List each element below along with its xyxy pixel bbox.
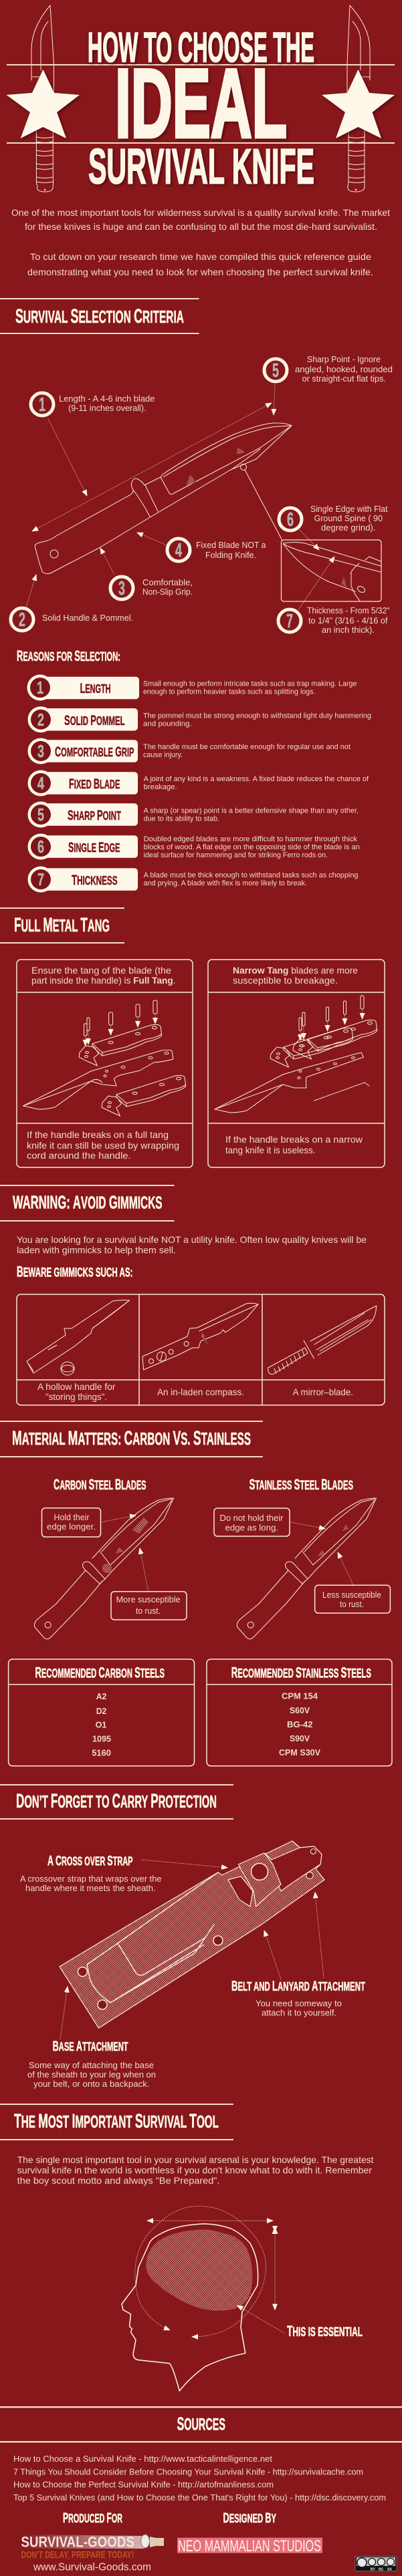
callout 3 (100, 548, 193, 599)
panel: carbon steel blades (34, 1476, 187, 1639)
icon: left header knife (31, 5, 54, 192)
text: warning: laden with gimmicks to help them sell. (17, 1245, 176, 1256)
callout: base attachment: of the sheath to your leg when on (27, 2070, 156, 2080)
row 2 solid pommel: SOLID POMMEL (64, 713, 125, 728)
panel: full tang: Ensure the tang of the blade (the (31, 965, 171, 976)
callout: more susceptible (111, 1548, 187, 1620)
callout 5: Sharp Point - Ignore (307, 354, 381, 364)
heading: survival selection criteria: SURVIVAL SELECTION CRITERIA (15, 305, 184, 327)
panel: recommended carbon steels: 1095 (92, 1734, 111, 1744)
callout 2: Solid Handle & Pommel. (42, 613, 133, 623)
callout 7: to 1/4" (3/16 - 4/16 of (308, 615, 388, 625)
row 6 single edge: SINGLE EDGE (68, 840, 120, 855)
intro text: One of the most important tools for wilderness survival is a quality survival knife. The market (11, 207, 390, 218)
icon: narrow tang exploded knife (215, 996, 377, 1113)
row 2 solid pommel (28, 706, 371, 732)
row 5 sharp point: A sharp (or spear) point is a better defensive shape than any other, (144, 807, 359, 815)
row 1 length: 1 (37, 678, 43, 698)
panel: recommended stainless steels: S90V (290, 1733, 310, 1743)
callout 6: Single Edge with Flat (310, 504, 388, 514)
callout: base attachment: BASE ATTACHMENT (53, 2039, 128, 2054)
text: knowledge (17, 2154, 374, 2186)
panel: full tang: If the handle breaks on a full tang (27, 1129, 169, 1140)
heading: sources: SOURCES (177, 2414, 225, 2434)
callout 1 (31, 393, 155, 496)
row 7 thickness: A blade must be thick enough to withstand tasks such as chopping (144, 871, 359, 879)
panel: narrow tang: tang knife it is useless. (225, 1145, 316, 1155)
panel: narrow tang (208, 960, 385, 1167)
icon: sheath (60, 1841, 324, 2028)
row 6 single edge: 6 (37, 837, 44, 857)
callout 6 (279, 504, 388, 550)
icon: creative commons badge: BY (371, 2567, 376, 2571)
row 6 single edge: Doubled edged blades are more difficult to hammer through thick (144, 835, 357, 843)
text: knowledge: the boy scout motto and always "Be Prepared". (17, 2175, 219, 2186)
panel: recommended carbon steels: 5160 (92, 1748, 111, 1758)
list: sources (13, 2454, 386, 2502)
logo: neo mammalian studios: NEO MAMMALIAN STUDIOS (178, 2537, 321, 2555)
panel: recommended carbon steels: A2 (96, 1691, 106, 1701)
list: sources: How to Choose the Perfect Survival Knife - http://artofmanliness.com (13, 2480, 274, 2490)
panel: full tang: part inside the handle) is Full Tang. (31, 975, 175, 986)
row 4 fixed blade: A joint of any kind is a weakness. A fixed blade reduces the chance of (144, 775, 369, 783)
icon: right star (322, 69, 395, 138)
callout 4: Folding Knife. (205, 550, 256, 560)
callout 3: Comfortable, (142, 577, 193, 587)
row 3 comfortable grip: The handle must be comfortable enough for regular use and not (143, 743, 350, 751)
panel: recommended stainless steels (207, 1659, 392, 1766)
panel: recommended stainless steels: CPM S30V (279, 1747, 320, 1757)
logo: survival goods: www.Survival-Goods.com (33, 2562, 151, 2573)
row 1 length (27, 675, 357, 700)
row 7 thickness (28, 866, 359, 893)
callout: belt and lanyard attachment: You need someway to (256, 1999, 342, 2009)
icon: compass knife (142, 1303, 258, 1370)
row 2 solid pommel: 2 (37, 710, 44, 730)
row 5 sharp point: SHARP POINT (68, 808, 121, 823)
panel: recommended stainless steels: RECOMMENDED STAINLESS STEELS (231, 1665, 371, 1681)
icon: main knife (35, 423, 292, 574)
callout 1: (9-11 inches overall). (68, 403, 146, 413)
panel: gimmick table: A mirror–blade. (293, 1387, 353, 1397)
header rule top (7, 64, 395, 65)
panel: carbon steel blades: CARBON STEEL BLADES (54, 1476, 146, 1493)
intro text: demonstrating what you need to look for when choosing the perfect survival knife. (27, 267, 373, 277)
callout 6: 6 (287, 509, 294, 531)
callout 5 (264, 354, 393, 415)
callout 4 (137, 533, 266, 561)
panel: full tang (17, 960, 193, 1167)
inset: blade cross-section (281, 540, 381, 601)
panel: recommended carbon steels: D2 (96, 1706, 106, 1716)
callout 5: angled, hooked, rounded (295, 364, 393, 374)
row 5 sharp point (28, 802, 359, 827)
row 7 thickness: 7 (37, 869, 44, 889)
row 4 fixed blade: breakage. (144, 783, 177, 791)
intro text: for these knives is huge and can be confusing to all but the most die-hard survivalist. (25, 221, 377, 232)
panel: recommended stainless steels: BG-42 (287, 1719, 313, 1729)
callout 1: 1 (39, 394, 45, 416)
callout: belt and lanyard attachment: BELT AND LANYARD ATTACHMENT (231, 1979, 365, 1994)
panel: recommended carbon steels (9, 1659, 194, 1766)
callout 6: degree grind). (321, 523, 376, 533)
callout 2: 2 (19, 609, 25, 631)
row 3 comfortable grip: COMFORTABLE GRIP (55, 744, 134, 760)
panel: narrow tang: If the handle breaks on a narrow (225, 1134, 363, 1145)
logo: survival goods: DON'T DELAY, PREPARE TODAY! (21, 2549, 134, 2561)
callout 6: Ground Spine ( 90 (314, 513, 383, 523)
row 4 fixed blade (28, 770, 369, 797)
callout 1: Length - A 4-6 inch blade (59, 394, 155, 404)
panel: recommended stainless steels: S60V (290, 1705, 310, 1715)
row 7 thickness: and prying. A blade with flex is more likely to break. (144, 879, 307, 887)
callout: cross over strap: handle where it meets the sheath. (25, 1884, 156, 1893)
row 2 solid pommel: and pounding. (143, 720, 192, 728)
callout: more susceptible: More susceptible (116, 1594, 181, 1604)
text: warning: You are looking for a survival knife NOT a utility knife. Often low quality knives will be (17, 1234, 367, 1245)
row 5 sharp point: due to its ability to stab. (144, 815, 219, 823)
panel: narrow tang: susceptible to breakage. (233, 975, 338, 986)
text: knowledge: The single most important tool in your survival arsenal is your knowledge. The greatest (17, 2154, 374, 2165)
row 6 single edge: blocks of wood. A flat edge on the opposing side of the blade is an (144, 843, 360, 851)
text: knowledge: survival knife in the world is worthless if you don't know what to do with it. Remember (17, 2165, 372, 2176)
heading: material matters: MATERIAL MATTERS: CARBON VS. STAINLESS (12, 1427, 251, 1449)
intro text (11, 207, 390, 277)
callout 7: Thickness - From 5/32" (307, 605, 390, 615)
callout: less susceptible: to rust. (340, 1599, 364, 1609)
callout: this is essential: THIS IS ESSENTIAL (287, 2323, 363, 2339)
callout: do not hold their edge (214, 1508, 325, 1536)
row 4 fixed blade: FIXED BLADE (69, 776, 120, 792)
row 6 single edge: ideal surface for hammering and for striking Ferro rods on. (144, 851, 328, 859)
callout: cross over strap (20, 1854, 227, 1893)
heading: full metal tang: FULL METAL TANG (14, 914, 110, 936)
row 2 solid pommel: The pommel must be strong enough to withstand light duty hammering (143, 712, 371, 720)
callout: cross over strap: A crossover strap that wraps over the (20, 1874, 162, 1884)
row 1 length: enough to perform heavier tasks such as splitting logs. (143, 688, 316, 696)
callout 5: or straight-cut flat tips. (302, 374, 386, 384)
callout: do not hold their edge: edge as long. (225, 1523, 278, 1533)
icon: creative commons badge: SA (387, 2567, 392, 2571)
row 3 comfortable grip: cause injury. (143, 751, 183, 759)
row 3 comfortable grip (28, 738, 350, 764)
subheading: beware gimmicks: BEWARE GIMMICKS SUCH AS: (17, 1264, 132, 1280)
callout: belt and lanyard attachment (231, 1892, 365, 2018)
row 1 length: LENGTH (80, 681, 111, 696)
callout: hold their edge: Hold their (54, 1512, 90, 1522)
callout: hold their edge (41, 1508, 136, 1537)
callout 4: Fixed Blade NOT a (196, 540, 266, 550)
panel: recommended carbon steels: O1 (96, 1720, 106, 1730)
callout 7: an inch thick). (322, 625, 375, 635)
icon: left star (7, 69, 80, 138)
panel: gimmick table (17, 1294, 385, 1405)
icon: stainless knife (237, 1498, 376, 1639)
title (88, 24, 314, 194)
text: warning (17, 1234, 367, 1256)
header rule bottom (7, 142, 395, 144)
heading: designed by: DESIGNED BY (223, 2511, 276, 2526)
panel: stainless steel blades (214, 1476, 390, 1639)
callout: base attachment: Some way of attaching the base (29, 2061, 154, 2070)
list: sources: Top 5 Survival Knives (and How to Choose the One That's Right for You) - http://dsc.discovery.com (13, 2492, 386, 2502)
panel: recommended carbon steels: RECOMMENDED CARBON STEELS (35, 1665, 165, 1681)
panel: gimmick table: "storing things". (45, 1392, 107, 1402)
icon: creative commons badge: NC (379, 2567, 384, 2571)
panel: narrow tang: Narrow Tang blades are more (233, 965, 358, 976)
panel: gimmick table: A hollow handle for (37, 1382, 116, 1392)
callout: more susceptible: to rust. (136, 1606, 161, 1616)
logo: survival goods (20, 2534, 164, 2573)
panel: gimmick table: An in-laden compass. (157, 1387, 244, 1397)
callout 5: 5 (272, 360, 279, 382)
row 5 sharp point: 5 (37, 805, 44, 825)
panel: full tang: knife it can still be used by wrapping (27, 1140, 179, 1151)
row 1 length: Small enough to perform intricate tasks such as trap making. Large (143, 680, 357, 688)
row 4 fixed blade: 4 (37, 773, 44, 793)
callout: this is essential (237, 2305, 363, 2339)
callout: belt and lanyard attachment: attach it to yourself. (262, 2009, 336, 2018)
callout 3: 3 (118, 578, 125, 599)
heading: most important survival tool: THE MOST IMPORTANT SURVIVAL TOOL (14, 2110, 219, 2132)
callout 7 (278, 557, 390, 635)
panel: full tang: cord around the handle. (27, 1150, 131, 1161)
callout: base attachment: your belt, or onto a backpack. (33, 2080, 150, 2089)
heading: produced for: PRODUCED FOR (63, 2511, 122, 2526)
title: IDEAL (115, 49, 287, 158)
panel: stainless steel blades: STAINLESS STEEL BLADES (249, 1476, 353, 1493)
icon: creative commons badge (355, 2557, 397, 2571)
list: reasons for selection (27, 675, 371, 893)
row 3 comfortable grip: 3 (37, 741, 44, 761)
callout 2 (11, 575, 133, 631)
callout: hold their edge: edge longer. (47, 1522, 96, 1532)
logo: neo mammalian studios (177, 2537, 322, 2555)
callout: base attachment (27, 1987, 156, 2089)
callout: less susceptible (315, 1552, 390, 1613)
list: sources: 7 Things You Should Consider Before Choosing Your Survival Knife - http://survivalcache.com (13, 2467, 363, 2477)
callout: less susceptible: Less susceptible (322, 1590, 381, 1600)
diagram: knife anatomy (11, 354, 393, 635)
icon: full tang exploded knife (23, 1000, 186, 1116)
callout: cross over strap: A CROSS OVER STRAP (47, 1854, 132, 1869)
icon: mirror blade knife (268, 1306, 377, 1374)
panel: recommended stainless steels: CPM 154 (282, 1691, 318, 1701)
icon: hollow handle knife (27, 1300, 130, 1375)
callout 3: Non-Slip Grip. (142, 587, 193, 597)
row 7 thickness: THICKNESS (72, 873, 118, 888)
intro text: To cut down on your research time we have compiled this quick reference guide (30, 251, 371, 262)
arrow: length (32, 403, 272, 531)
icon: carbon knife (34, 1498, 173, 1639)
icon: right header knife (347, 5, 370, 192)
callout 4: 4 (175, 540, 182, 561)
heading: warning avoid gimmicks: WARNING: AVOID GIMMICKS (13, 1192, 163, 1213)
callout: do not hold their edge: Do not hold their (219, 1513, 284, 1523)
row 6 single edge (28, 834, 360, 859)
logo: survival goods: SURVIVAL-GOODS (21, 2534, 134, 2551)
icon: head diagram (122, 2206, 278, 2391)
list: sources: How to Choose a Survival Knife - http://www.tacticalintelligence.net (13, 2454, 272, 2464)
heading: reasons for selection: REASONS FOR SELECTION: (17, 648, 120, 664)
heading: carry protection: DON’T FORGET TO CARRY PROTECTION (16, 1790, 217, 1812)
callout 7: 7 (286, 611, 293, 632)
